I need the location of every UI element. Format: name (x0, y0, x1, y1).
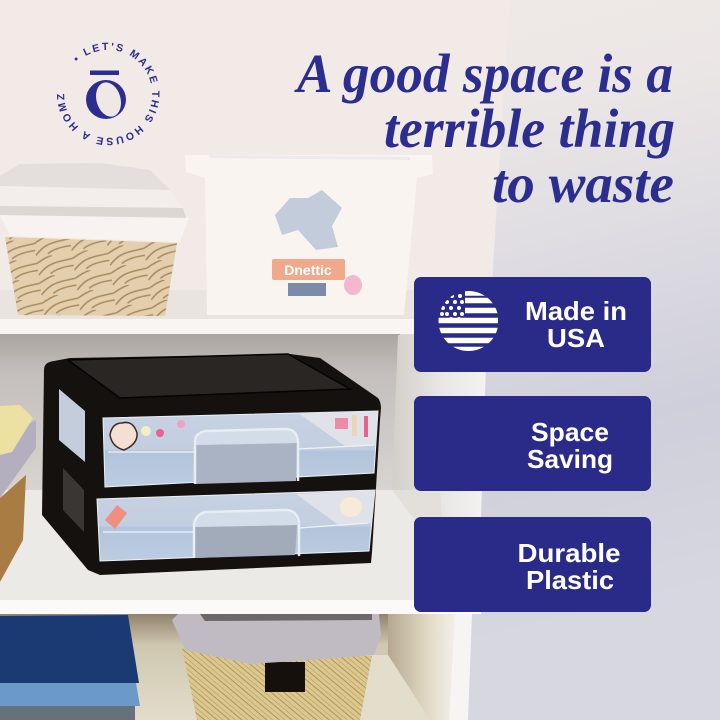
badge: Durable Plastic (414, 517, 651, 612)
title: terrible thing (384, 98, 675, 159)
organizer body (42, 354, 381, 575)
black plastic two-drawer organizer (42, 354, 381, 575)
label: Saving (527, 444, 613, 474)
label: Durable (518, 538, 620, 568)
label: Made in (525, 296, 627, 326)
lid tray (68, 354, 350, 398)
label (525, 296, 627, 353)
circular slogan: • LET'S MAKE THIS HOUSE A HOMZ (56, 42, 160, 146)
logo mark: bar over ring (86, 70, 126, 120)
title: A good space is a (294, 43, 673, 104)
side windows (59, 389, 85, 462)
lower drawer (97, 490, 375, 561)
upper drawer (103, 411, 378, 487)
label (518, 538, 620, 595)
label: Space (531, 417, 609, 447)
translucent storage tub with stickers: Dnettic (284, 262, 332, 278)
label (527, 417, 613, 474)
stickers (110, 422, 137, 450)
label: USA (547, 323, 605, 353)
badge: Made in USA (414, 277, 651, 372)
label: Plastic (526, 565, 614, 595)
title (294, 43, 675, 214)
title: to waste (492, 153, 674, 214)
logo badge (56, 42, 160, 146)
lower woven basket with grey liner (172, 614, 381, 720)
translucent storage tub with stickers (185, 155, 433, 315)
stickers (105, 505, 127, 529)
folded jeans stack (0, 615, 140, 720)
badge: Space Saving (414, 396, 651, 491)
folded towels in wicker basket (0, 163, 189, 316)
icon: American flag circle (438, 291, 500, 351)
left basket with cloth and yellow towel (0, 405, 36, 582)
